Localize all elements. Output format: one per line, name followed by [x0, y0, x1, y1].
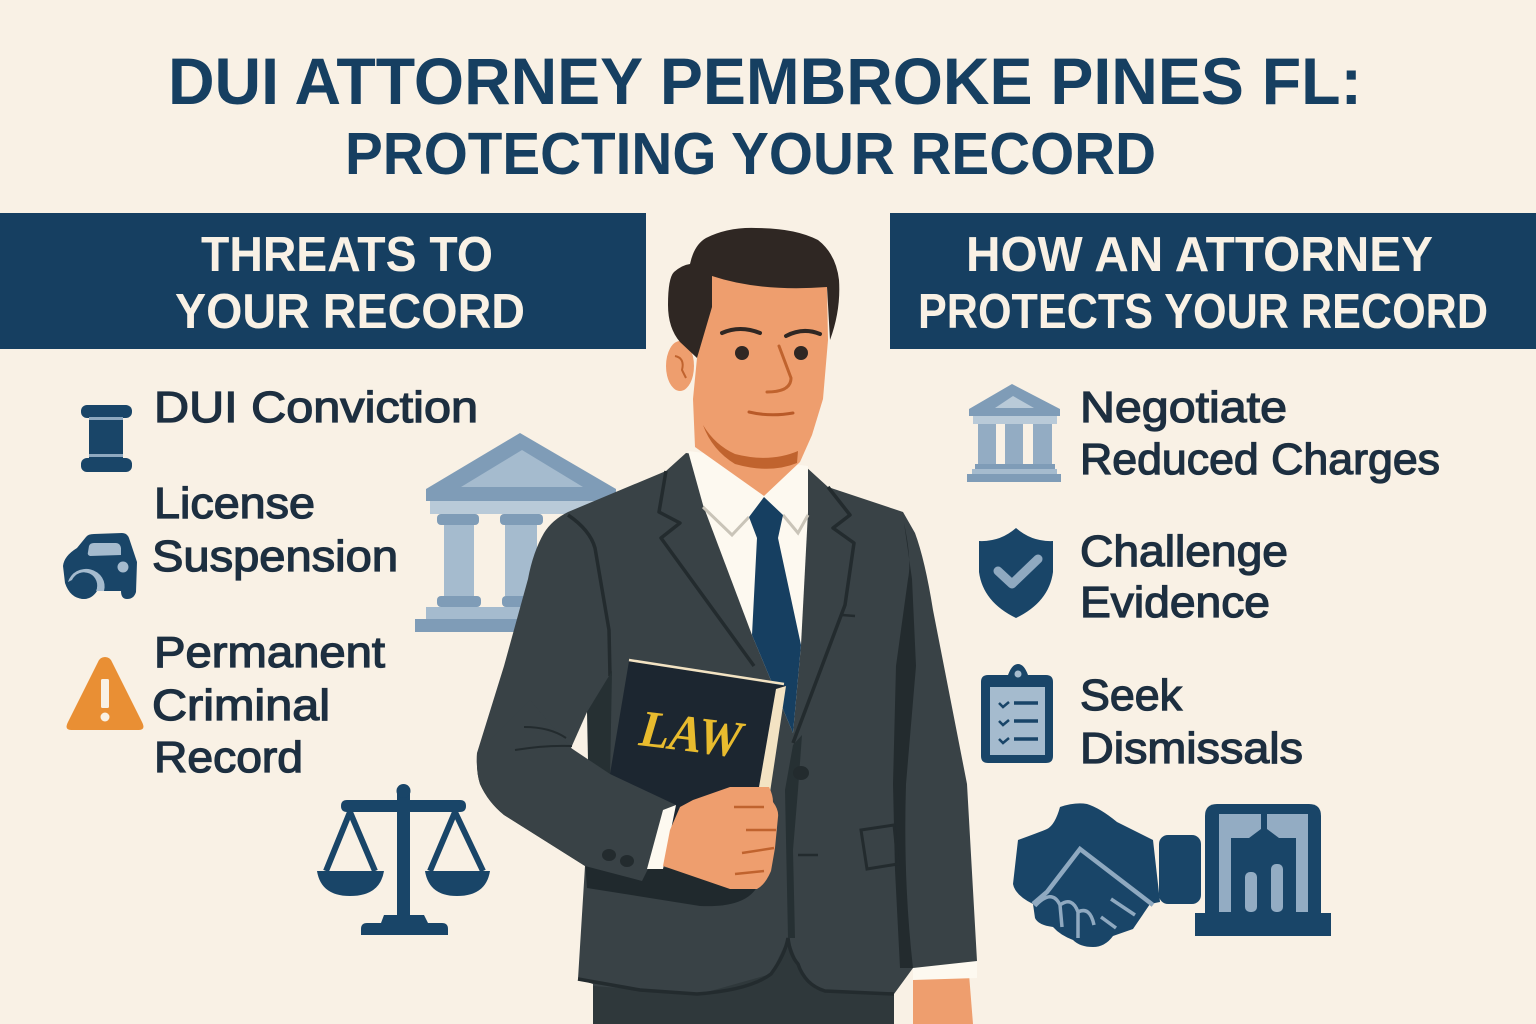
- title: [168, 44, 1362, 187]
- text: Negotiate Reduced Charges: Negotiate: [1080, 383, 1287, 432]
- text: Negotiate Reduced Charges: Reduced Charges: [1080, 435, 1440, 484]
- text: Seek Dismissals: Seek: [1080, 671, 1183, 720]
- left sleeve: [477, 700, 676, 881]
- text: Seek Dismissals: [1080, 671, 1303, 773]
- panel: threats list: [63, 383, 478, 782]
- face and neck: [693, 276, 828, 496]
- icon: car: [63, 533, 137, 599]
- title: DUI ATTORNEY PEMBROKE PINES FL:: [168, 44, 1362, 118]
- tie: [749, 497, 801, 733]
- text: Challenge Evidence: Challenge: [1080, 527, 1288, 576]
- icon: large courthouse: [415, 433, 616, 632]
- hair: [668, 228, 839, 358]
- nose: [767, 346, 791, 392]
- text: DUI Conviction: DUI Conviction: [154, 383, 478, 432]
- book: [610, 660, 786, 880]
- text: Seek Dismissals: Dismissals: [1080, 724, 1303, 773]
- gap between arm and body: [571, 712, 588, 761]
- jacket: [477, 453, 977, 1024]
- text: License Suspension: Suspension: [152, 532, 398, 581]
- text: Negotiate Reduced Charges: [1080, 383, 1440, 484]
- text: Challenge Evidence: Evidence: [1080, 578, 1270, 627]
- panel: attorney actions list: [967, 383, 1440, 773]
- attorney figure: [477, 228, 977, 1024]
- text: Permanent Criminal Record: Permanent: [154, 628, 385, 677]
- icon: gavel head: [81, 405, 132, 472]
- text: License Suspension: License: [154, 479, 315, 528]
- icon: scales of justice: [317, 784, 490, 935]
- holding hand: [663, 787, 778, 889]
- jacket button: [793, 766, 809, 780]
- eyes and brows: [722, 329, 820, 360]
- text: Challenge Evidence: [1080, 527, 1288, 627]
- left lapel lines: [659, 471, 754, 666]
- text: License Suspension: [152, 479, 398, 581]
- jaw shadow: [703, 425, 798, 469]
- panel heading: how an attorney protects your record: HOW AN ATTORNEY: [966, 228, 1433, 282]
- text: Permanent Criminal Record: [152, 628, 385, 782]
- elbow creases: [515, 727, 572, 750]
- finger lines: [734, 807, 776, 874]
- panel heading: threats to your record: YOUR RECORD: [175, 285, 525, 339]
- icon: handshake: [1013, 803, 1201, 947]
- icon: small courthouse: [967, 384, 1061, 482]
- text: Permanent Criminal Record: Record: [154, 733, 303, 782]
- right hand: [913, 974, 973, 1024]
- ear: [666, 341, 694, 391]
- trousers: [593, 938, 894, 1024]
- shirt: [688, 451, 808, 733]
- book shadow: [585, 862, 757, 906]
- jacket small marks: [798, 615, 855, 855]
- book title: LAW: [636, 700, 748, 770]
- left shoulder seam: [568, 515, 610, 676]
- sleeve buttons: [602, 849, 634, 867]
- cuff: [647, 805, 676, 869]
- right cuff: [913, 961, 977, 980]
- icon: clipboard checklist: [981, 664, 1053, 763]
- right sleeve shading: [893, 523, 916, 968]
- title: PROTECTING YOUR RECORD: [345, 121, 1156, 187]
- front shading: [785, 735, 802, 938]
- panel heading: how an attorney protects your record: [890, 213, 1536, 349]
- panel heading: threats to your record: [0, 213, 646, 349]
- panel heading: threats to your record: THREATS TO: [201, 228, 493, 282]
- icon: shield with check: [979, 528, 1053, 618]
- right lapel lines: [793, 487, 854, 743]
- icon: warning triangle: [67, 657, 143, 730]
- collar shadow: [703, 507, 808, 535]
- icon: courthouse building: [1195, 804, 1331, 936]
- jacket hem and front lines: [578, 938, 894, 994]
- jacket pocket: [861, 825, 898, 869]
- mouth: [749, 412, 793, 415]
- armhole shadow: [587, 671, 612, 780]
- text: Permanent Criminal Record: Criminal: [152, 681, 330, 730]
